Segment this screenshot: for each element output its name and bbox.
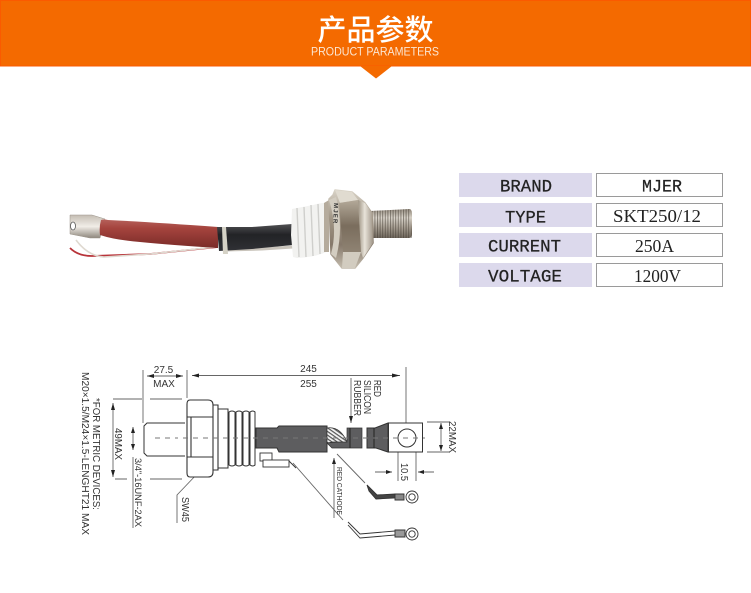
crimp barrel [367,423,388,452]
row: type [459,203,722,228]
centre line [155,437,425,439]
thin red and white wires [70,240,293,257]
extension and dimension lines [113,367,450,528]
row: type: TYPE [505,208,546,228]
row: current: 250A [635,236,674,256]
hatched braided conductor [327,428,347,443]
drawing annotations [79,364,457,535]
row: voltage: VOLTAGE [488,268,562,288]
banner pointer [360,66,392,78]
dim 245 / 255 [300,364,317,390]
insulator ribs [218,409,255,468]
ring terminal [388,423,422,452]
parameter table [459,173,722,288]
white ceramic insulator [291,203,326,258]
hexagon nut outline [187,400,218,477]
row: voltage [459,263,722,288]
ring lug [70,215,105,238]
technical drawing [111,367,450,540]
title: 产品参数 [317,7,434,49]
header banner [0,0,750,78]
row: brand [459,173,722,198]
vertical labels: RUBBER [351,380,362,416]
row: current [459,233,722,258]
cable shrink sleeve [256,426,327,452]
threaded stud [371,209,412,238]
vertical labels: *FOR METRIC DEVICES: [90,398,101,510]
threaded stud outline [144,423,185,456]
row: type: SKT250/12 [613,206,701,226]
product photo: thyristor [70,190,412,268]
dim 27.5 max: MAX [153,379,175,390]
row: brand: BRAND [500,178,552,198]
white lead [348,522,418,540]
vertical labels: 22MAX [446,421,457,453]
red silicone sleeve [100,220,218,248]
vertical labels: 3/4"-16UNF-2AX [133,458,143,527]
vertical labels: RED CATHODE [335,467,342,515]
subtitle: PRODUCT PARAMETERS [311,46,439,58]
arrowheads [111,374,443,477]
black heat-shrink [217,224,293,251]
dim 245 / 255: 255 [300,379,317,390]
vertical labels: SILICON [361,380,372,414]
vertical labels [79,372,457,535]
row: brand: MJER [642,178,682,198]
vertical labels: 10.5 [398,463,409,481]
dim 245 / 255: 245 [300,364,317,375]
cable sleeve [327,428,362,448]
row: current: CURRENT [488,238,561,258]
vertical labels: SW45 [179,497,190,522]
gate terminal fixture [260,453,296,468]
dim 27.5 max [153,365,175,390]
vertical labels: M20×1.5/M24×1.5-LENGHT21 MAX [79,372,90,535]
red lead [367,485,418,503]
white cable tie [222,227,228,254]
vertical labels: 49MAX [112,428,123,460]
vertical labels: RED [371,380,382,397]
engraved marking: MJER [331,203,338,225]
row: voltage: 1200V [634,266,681,286]
metal hex body [324,190,373,268]
dim 27.5 max: 27.5 [154,365,174,376]
